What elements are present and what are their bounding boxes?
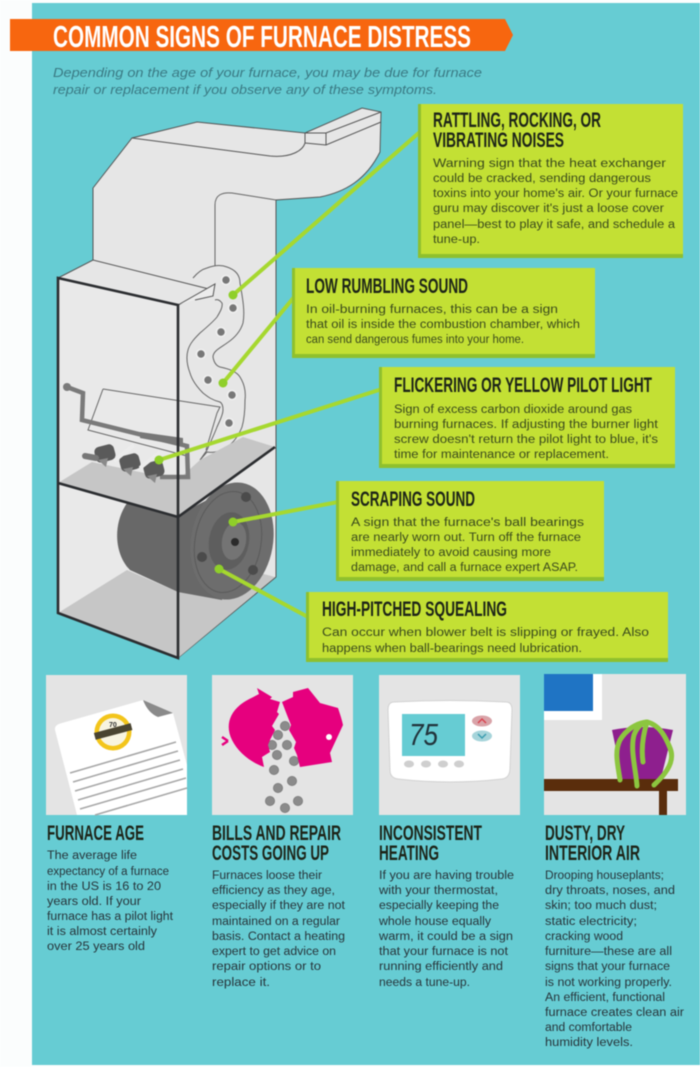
column: dusty dry air: INTERIOR AIR	[545, 841, 640, 865]
panel: rattling: could be cracked, sending dangerous	[433, 173, 651, 185]
panel: rattling: panel—best to play it safe, and schedule a	[433, 219, 676, 231]
panel: squealing: happens when ball-bearings need lubrication.	[322, 643, 582, 655]
panel: scraping: immediately to avoid causing more	[351, 547, 551, 559]
intro text: Depending on the age of your furnace, you may be due for furnace	[53, 66, 482, 80]
column: inconsistent heating: whole house equally	[378, 916, 491, 928]
column: dusty dry air: static electricity;	[545, 916, 637, 928]
cabinet front and top	[58, 278, 178, 658]
column: inconsistent heating: especially keeping the	[379, 900, 499, 912]
column: dusty dry air: humidity levels.	[545, 1037, 633, 1049]
column: bills and repair costs: efficiency as they age,	[212, 885, 335, 897]
duct and cabinet body	[93, 108, 381, 658]
panel: rattling: RATTLING, ROCKING, OR	[433, 108, 601, 132]
panel: rattling	[418, 104, 683, 258]
column: inconsistent heating: needs a tune-up.	[379, 977, 470, 989]
column: furnace age: over 25 years old	[47, 941, 145, 953]
column: bills and repair costs: repair options or to	[212, 961, 321, 973]
column: dusty dry air: cracking wood	[545, 931, 623, 943]
column: inconsistent heating: with your thermostat,	[378, 885, 498, 897]
panel: rattling: tune-up.	[433, 234, 480, 246]
column: inconsistent heating: warm, it could be a sign	[378, 931, 513, 943]
panel: low rumbling: In oil-burning furnaces, this can be a sign	[306, 304, 558, 316]
shelf	[58, 437, 275, 517]
panel: low rumbling	[292, 268, 595, 358]
column: bills and repair costs: COSTS GOING UP	[212, 841, 329, 865]
column: dusty dry air: is not working properly.	[545, 977, 672, 989]
icon: drooping plant	[544, 674, 686, 815]
panel: rattling: Warning sign that the heat exchanger	[433, 158, 666, 170]
column: furnace age: in the US is 16 to 20	[47, 881, 161, 893]
intro text: repair or replacement if you observe any of these symptoms.	[53, 83, 437, 97]
column: bills and repair costs: basis. Contact a heating	[212, 931, 345, 943]
panel: rattling: toxins into your home's air. Or your furnace	[433, 188, 678, 200]
panel: scraping: are nearly worn out. Turn off the furnace	[351, 532, 581, 544]
icon: broken piggy bank	[212, 675, 353, 815]
column: inconsistent heating: HEATING	[379, 841, 439, 865]
column: bills and repair costs: maintained on a regular	[212, 916, 340, 928]
column: bills and repair costs: especially if they are not	[212, 900, 346, 912]
icon: thermostat	[379, 675, 520, 815]
furnace illustration	[58, 108, 381, 658]
column: dusty dry air: An efficient, functional	[545, 992, 665, 1004]
column: furnace age	[47, 821, 174, 953]
column: inconsistent heating: running efficiently and	[379, 961, 503, 973]
column: inconsistent heating: INCONSISTENT	[379, 821, 482, 845]
column: dusty dry air: Drooping houseplants;	[545, 870, 664, 882]
column: bills and repair costs: Furnaces loose their	[212, 870, 322, 882]
panel: flickering: Sign of excess carbon dioxide around gas	[394, 404, 632, 416]
column: furnace age: it is almost certainly	[47, 926, 157, 938]
column: furnace age: furnace has a pilot light	[47, 911, 174, 923]
panel: scraping: SCRAPING SOUND	[351, 487, 475, 511]
icon: certificate document: 70	[109, 722, 117, 729]
column: dusty dry air: DUSTY, DRY	[545, 821, 625, 845]
black cabinet outline	[58, 278, 275, 658]
title banner	[10, 19, 513, 54]
panel: squealing: Can occur when blower belt is slipping or frayed. Also	[322, 627, 649, 639]
burner assembly	[63, 383, 220, 483]
panel: flickering	[379, 367, 675, 468]
column: inconsistent heating: If you are having trouble	[379, 870, 514, 882]
column: furnace age: years old. If your	[47, 896, 141, 908]
title banner: COMMON SIGNS OF FURNACE DISTRESS	[53, 19, 471, 54]
panel: flickering: time for maintenance or replacement.	[394, 449, 609, 461]
column: bills and repair costs	[212, 821, 346, 989]
panel: rattling: guru may discover it's just a loose cover	[433, 203, 664, 215]
column: bills and repair costs: replace it.	[212, 977, 270, 989]
icon: thermostat: 75	[409, 717, 439, 752]
heat exchanger	[187, 266, 245, 460]
panel: squealing	[306, 592, 668, 662]
column: bills and repair costs: expert to get advice on	[212, 946, 336, 958]
column: dusty dry air: dry throats, noses, and	[545, 885, 675, 897]
panel: flickering: screw doesn't return the pilot light to blue, it's	[394, 434, 658, 446]
panel: scraping: A sign that the furnace's ball bearings	[351, 517, 584, 529]
icon: certificate document	[46, 675, 187, 815]
pointer lines	[154, 131, 421, 617]
panel: low rumbling: can send dangerous fumes into your home.	[306, 334, 524, 346]
column: dusty dry air: skin; too much dust;	[545, 900, 657, 912]
column: furnace age: expectancy of a furnace	[47, 866, 169, 878]
panel: low rumbling: that oil is inside the combustion chamber, which	[306, 319, 580, 331]
column: dusty dry air: signs that your furnace	[545, 961, 670, 973]
panel: scraping: damage, and call a furnace expert ASAP.	[351, 562, 578, 574]
column: inconsistent heating: that your furnace is not	[379, 946, 509, 958]
column: bills and repair costs: BILLS AND REPAIR	[212, 821, 341, 845]
panel: scraping	[336, 481, 604, 581]
intro text	[53, 66, 482, 97]
column: dusty dry air: and comfortable	[545, 1022, 632, 1034]
column: inconsistent heating	[378, 821, 514, 989]
column: furnace age: FURNACE AGE	[47, 821, 144, 845]
exchanger bolts	[196, 276, 238, 428]
panel: low rumbling: LOW RUMBLING SOUND	[306, 274, 468, 298]
blower motor	[117, 476, 283, 606]
column: dusty dry air: furniture—these are all	[545, 946, 672, 958]
floor	[58, 570, 275, 658]
panel: squealing: HIGH-PITCHED SQUEALING	[322, 597, 507, 621]
panel: rattling: VIBRATING NOISES	[433, 128, 564, 152]
column: dusty dry air	[545, 821, 684, 1049]
column: dusty dry air: furnace creates clean air	[545, 1007, 684, 1019]
column: furnace age: The average life	[47, 850, 137, 862]
panel: flickering: burning furnaces. If adjusting the burner light	[394, 419, 659, 431]
